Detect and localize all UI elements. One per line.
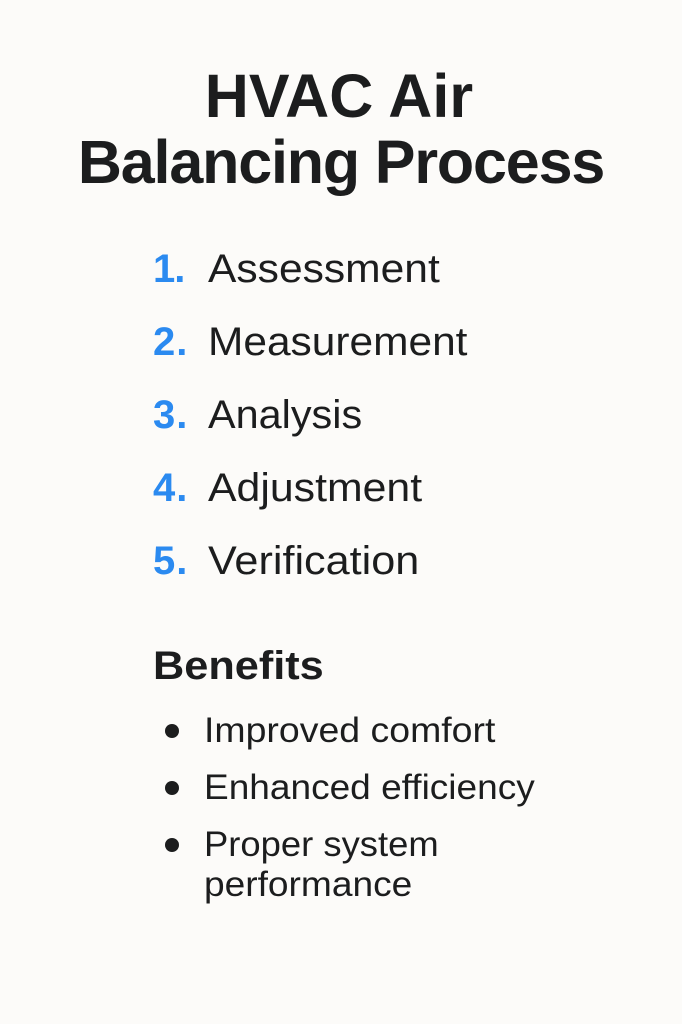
step 5 label: Verification	[208, 539, 419, 583]
benefit 2: Enhanced efficiency	[204, 768, 535, 807]
step 3 number: 3.	[153, 393, 188, 437]
bullet 3	[165, 838, 179, 852]
step 2 number: 2.	[153, 320, 188, 364]
title: HVAC Air	[205, 62, 473, 130]
title: Balancing Process	[78, 128, 604, 196]
step 1 label: Assessment	[208, 247, 440, 291]
title	[78, 62, 604, 196]
step 4 number: 4.	[153, 466, 188, 510]
step 3 label: Analysis	[208, 393, 362, 437]
bullet 1	[165, 724, 179, 738]
bullet 2	[165, 781, 179, 795]
step 4 label: Adjustment	[208, 466, 422, 510]
step 1 number: 1.	[153, 247, 184, 291]
benefit 1: Improved comfort	[204, 711, 495, 750]
step 2 label: Measurement	[208, 320, 467, 364]
step 5 number: 5.	[153, 539, 188, 583]
benefit 3: Proper system	[204, 825, 439, 864]
benefit 3	[204, 825, 439, 904]
benefits heading: Benefits	[153, 644, 324, 688]
benefit 3: performance	[204, 865, 412, 904]
